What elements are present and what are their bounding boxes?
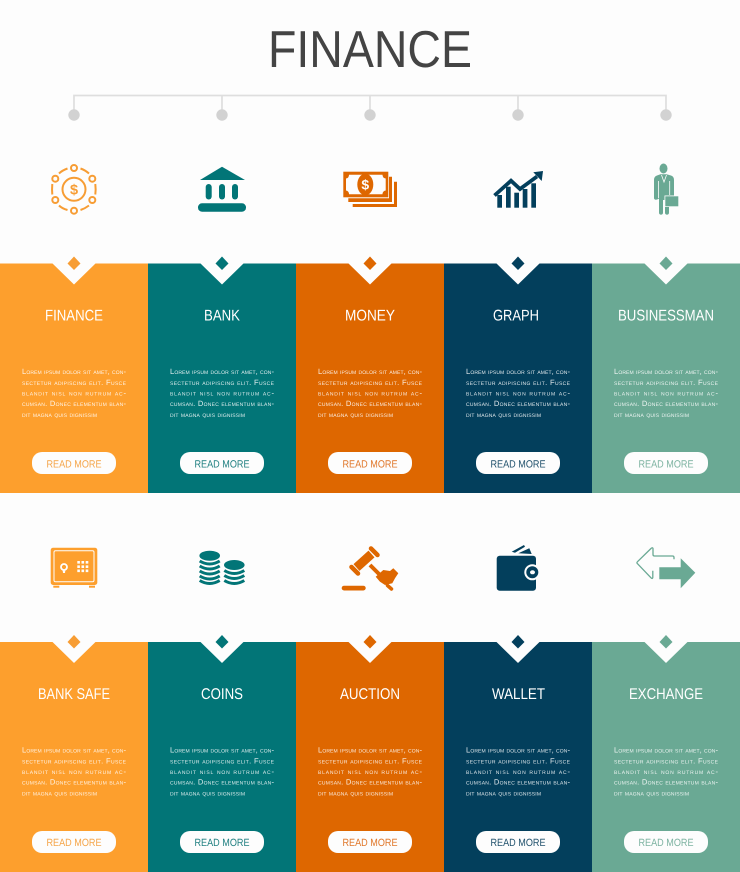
body text: dit magna quis dignissim (22, 788, 97, 798)
body text: sectetur adipiscing elit. Fusce (170, 756, 275, 766)
icon: money (343, 172, 397, 207)
marker diamond (512, 256, 524, 270)
body text: Lorem ipsum dolor sit amet, con- (466, 367, 570, 376)
body text: sectetur adipiscing elit. Fusce (22, 756, 127, 766)
panel: exchange (592, 635, 740, 872)
button: READ MORE (342, 458, 398, 470)
button: READ MORE (490, 458, 546, 470)
body text: cumsan. Donec elementum blan- (170, 778, 274, 786)
heading: BANK SAFE (38, 686, 110, 703)
panel: money (296, 256, 444, 493)
body text: cumsan. Donec elementum blan- (22, 399, 126, 408)
body text: blandit nisl non rutrum ac- (22, 388, 126, 398)
body text: cumsan. Donec elementum blan- (318, 399, 422, 408)
marker diamond (512, 635, 524, 648)
icon: growth graph (494, 171, 543, 208)
heading: GRAPH (493, 308, 539, 324)
body text: sectetur adipiscing elit. Fusce (614, 378, 719, 387)
body text: dit magna quis dignissim (466, 410, 541, 419)
body text: cumsan. Donec elementum blan- (466, 399, 570, 408)
body text: blandit nisl non rutrum ac- (614, 767, 718, 776)
marker diamond (216, 635, 228, 648)
body text: cumsan. Donec elementum blan- (318, 778, 422, 786)
icon: bank safe (51, 548, 97, 588)
body text: dit magna quis dignissim (318, 410, 393, 419)
button: READ MORE (342, 837, 398, 849)
panel: coins (148, 635, 296, 872)
body text: blandit nisl non rutrum ac- (466, 767, 570, 776)
body text: sectetur adipiscing elit. Fusce (22, 378, 127, 387)
button (32, 452, 116, 474)
body text: blandit nisl non rutrum ac- (318, 767, 422, 776)
heading: WALLET (492, 686, 545, 703)
panel: finance (0, 256, 148, 493)
body text: dit magna quis dignissim (170, 410, 245, 419)
body text (318, 746, 423, 798)
button (328, 831, 412, 853)
body text: Lorem ipsum dolor sit amet, con- (614, 367, 718, 376)
marker diamond (660, 635, 672, 648)
body text: cumsan. Donec elementum blan- (614, 399, 718, 408)
body text: Lorem ipsum dolor sit amet, con- (22, 746, 126, 754)
heading: MONEY (345, 308, 395, 324)
body text: sectetur adipiscing elit. Fusce (170, 378, 275, 387)
heading: COINS (201, 686, 243, 703)
panel: bank safe (0, 635, 148, 872)
body text: dit magna quis dignissim (22, 410, 97, 419)
button: READ MORE (638, 837, 694, 849)
body text: dit magna quis dignissim (614, 410, 689, 419)
body text: sectetur adipiscing elit. Fusce (466, 756, 571, 766)
body text: dit magna quis dignissim (170, 788, 245, 798)
body text (170, 367, 275, 419)
body text: sectetur adipiscing elit. Fusce (614, 756, 719, 766)
body text: Lorem ipsum dolor sit amet, con- (170, 746, 274, 754)
body text: cumsan. Donec elementum blan- (614, 778, 718, 786)
body text (170, 746, 275, 798)
body text (318, 367, 423, 419)
body text (614, 367, 719, 419)
button: READ MORE (194, 837, 250, 849)
button (328, 452, 412, 474)
marker diamond (364, 635, 376, 648)
heading: EXCHANGE (629, 686, 703, 703)
button: READ MORE (46, 458, 102, 470)
body text: dit magna quis dignissim (466, 788, 541, 798)
body text: cumsan. Donec elementum blan- (170, 399, 274, 408)
panel: businessman (592, 256, 740, 493)
body text (614, 746, 719, 798)
body text: Lorem ipsum dolor sit amet, con- (614, 746, 718, 754)
panel: graph (444, 256, 592, 493)
button: READ MORE (490, 837, 546, 849)
heading: BUSINESSMAN (618, 308, 714, 324)
heading: AUCTION (340, 686, 400, 703)
button (476, 452, 560, 474)
body text: sectetur adipiscing elit. Fusce (466, 378, 571, 387)
body text: Lorem ipsum dolor sit amet, con- (22, 367, 126, 376)
body text: blandit nisl non rutrum ac- (614, 388, 718, 398)
heading: BANK (204, 308, 241, 324)
body text: sectetur adipiscing elit. Fusce (318, 756, 423, 766)
marker diamond (660, 256, 672, 270)
button: READ MORE (194, 458, 250, 470)
body text: dit magna quis dignissim (614, 788, 689, 798)
body text: blandit nisl non rutrum ac- (170, 388, 274, 398)
title: FINANCE (268, 21, 472, 79)
body text (22, 746, 127, 798)
connector timeline (68, 96, 672, 121)
button (180, 452, 264, 474)
body text: Lorem ipsum dolor sit amet, con- (318, 367, 422, 376)
icon: finance network (52, 165, 96, 214)
icon: finance network: $ (70, 182, 78, 198)
body text (466, 367, 571, 419)
body text: blandit nisl non rutrum ac- (318, 388, 422, 398)
icon: exchange arrows (637, 548, 695, 588)
body text: cumsan. Donec elementum blan- (466, 778, 570, 786)
marker diamond (68, 256, 80, 270)
button: READ MORE (46, 837, 102, 849)
gavel head (356, 554, 372, 568)
icon: businessman (654, 164, 679, 215)
marker diamond (216, 256, 228, 270)
body text: Lorem ipsum dolor sit amet, con- (466, 746, 570, 754)
body text: sectetur adipiscing elit. Fusce (318, 378, 423, 387)
button: READ MORE (638, 458, 694, 470)
button (624, 452, 708, 474)
body text: blandit nisl non rutrum ac- (170, 767, 274, 776)
panel: auction (296, 635, 444, 872)
body text: Lorem ipsum dolor sit amet, con- (318, 746, 422, 754)
icon: coins (199, 551, 245, 584)
marker diamond (364, 256, 376, 270)
body text: dit magna quis dignissim (318, 788, 393, 798)
panel: bank (148, 256, 296, 493)
body text: cumsan. Donec elementum blan- (22, 778, 126, 786)
body text: Lorem ipsum dolor sit amet, con- (170, 367, 274, 376)
button (624, 831, 708, 853)
button (180, 831, 264, 853)
icon: wallet (497, 545, 540, 591)
icon: auction gavel (342, 548, 398, 590)
body text: blandit nisl non rutrum ac- (22, 767, 126, 776)
icon: money: $ (361, 176, 369, 192)
panel: wallet (444, 635, 592, 872)
body text (466, 746, 571, 798)
body text: blandit nisl non rutrum ac- (466, 388, 570, 398)
body text (22, 367, 127, 419)
icon: bank (198, 167, 246, 212)
button (476, 831, 560, 853)
button (32, 831, 116, 853)
heading: FINANCE (45, 308, 103, 324)
marker diamond (68, 635, 80, 648)
